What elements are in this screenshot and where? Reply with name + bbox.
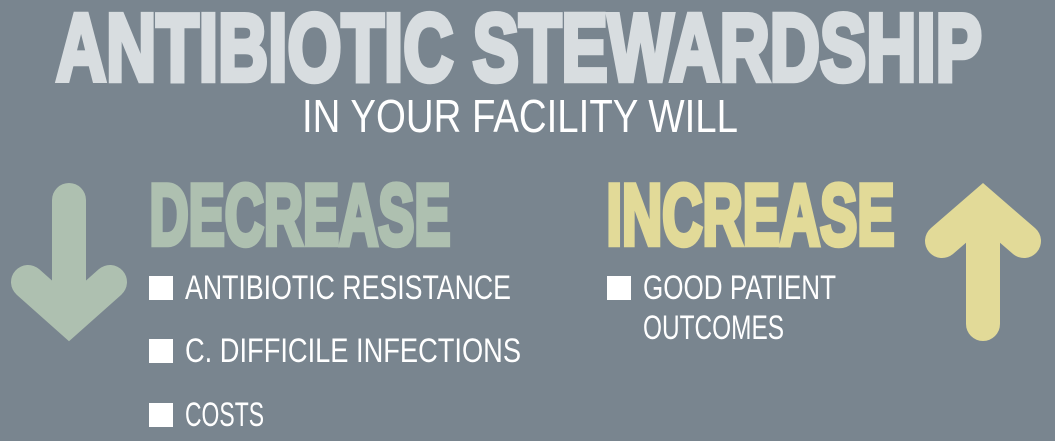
list item: antibiotic resistance: ANTIBIOTIC RESISTANCE	[185, 269, 511, 307]
heading: increase: INCREASE	[606, 168, 894, 264]
list item: costs	[149, 396, 264, 434]
list item: good patient outcomes: OUTCOMES	[643, 309, 784, 347]
icon: down arrow	[28, 200, 110, 318]
list item: c. difficile infections: C. DIFFICILE INFECTIONS	[185, 332, 521, 370]
list item: costs: COSTS	[185, 396, 264, 434]
panel: decrease	[28, 168, 521, 434]
panel: increase	[606, 168, 1024, 347]
heading: decrease: DECREASE	[150, 168, 450, 264]
list item: good patient outcomes: GOOD PATIENT	[643, 269, 836, 307]
subtitle: IN YOUR FACILITY WILL	[302, 90, 738, 142]
list item: good patient outcomes	[607, 269, 836, 347]
icon: up arrow	[942, 206, 1024, 324]
